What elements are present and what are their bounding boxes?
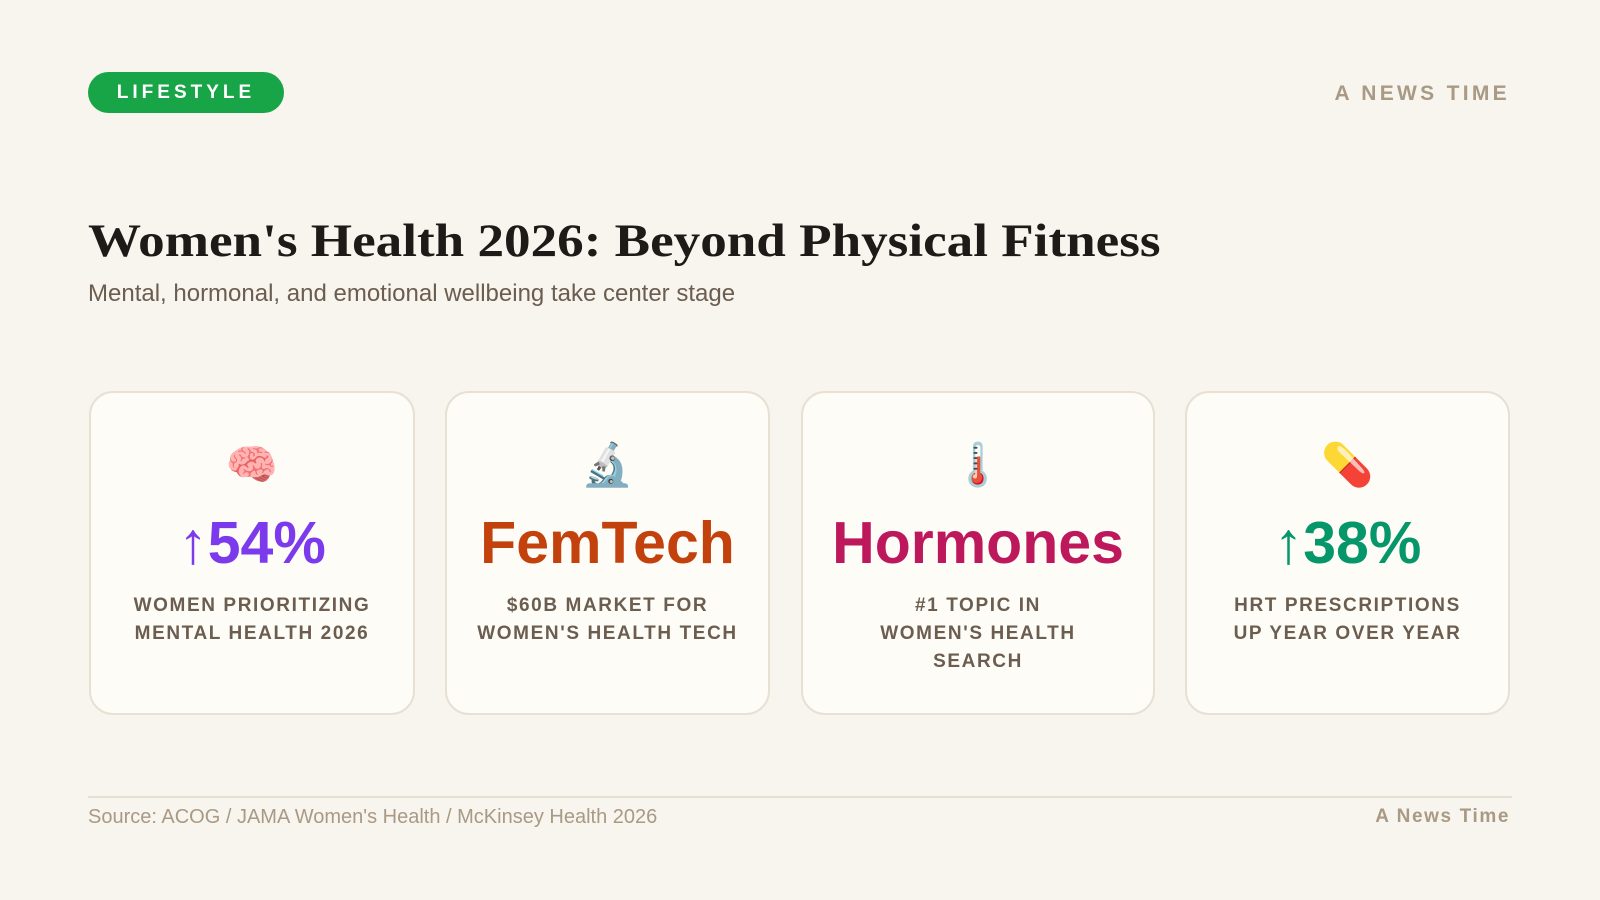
label: $60B MARKET FOR xyxy=(507,595,708,616)
icon: pill: 💊 xyxy=(1321,440,1374,489)
brand header: A NEWS TIME xyxy=(1334,82,1510,105)
panel: mental health xyxy=(89,391,415,715)
footer brand: A News Time xyxy=(1375,806,1510,827)
stat: FemTech: FemTech xyxy=(480,510,735,576)
label: WOMEN'S HEALTH xyxy=(880,623,1076,644)
label xyxy=(134,595,370,644)
label: HRT PRESCRIPTIONS xyxy=(1234,595,1461,616)
stat: 38%: ↑38% xyxy=(1274,510,1421,576)
panel: HRT xyxy=(1185,391,1510,715)
label: UP YEAR OVER YEAR xyxy=(1234,623,1461,644)
label: SEARCH xyxy=(933,651,1023,672)
label: WOMEN PRIORITIZING xyxy=(134,595,370,616)
label: WOMEN'S HEALTH TECH xyxy=(477,623,738,644)
subtitle: Mental, hormonal, and emotional wellbeing take center stage xyxy=(88,280,735,307)
category pill xyxy=(88,72,284,113)
label xyxy=(880,595,1076,672)
source: Source: ACOG / JAMA Women's Health / McKinsey Health 2026 xyxy=(88,806,657,828)
icon: brain: 🧠 xyxy=(226,440,278,489)
icon: thermometer: 🌡️ xyxy=(952,440,1004,489)
category pill: LIFESTYLE xyxy=(117,82,255,103)
stat: 54%: ↑54% xyxy=(178,510,326,576)
label: #1 TOPIC IN xyxy=(915,595,1041,616)
label: MENTAL HEALTH 2026 xyxy=(135,623,369,644)
label xyxy=(477,595,738,644)
icon: microscope: 🔬 xyxy=(581,440,634,489)
panel: hormones xyxy=(801,391,1155,715)
title: Women's Health 2026: Beyond Physical Fitness xyxy=(88,215,1161,267)
panel: femtech xyxy=(445,391,770,715)
label xyxy=(1234,595,1461,644)
stat: Hormones: Hormones xyxy=(832,510,1124,576)
